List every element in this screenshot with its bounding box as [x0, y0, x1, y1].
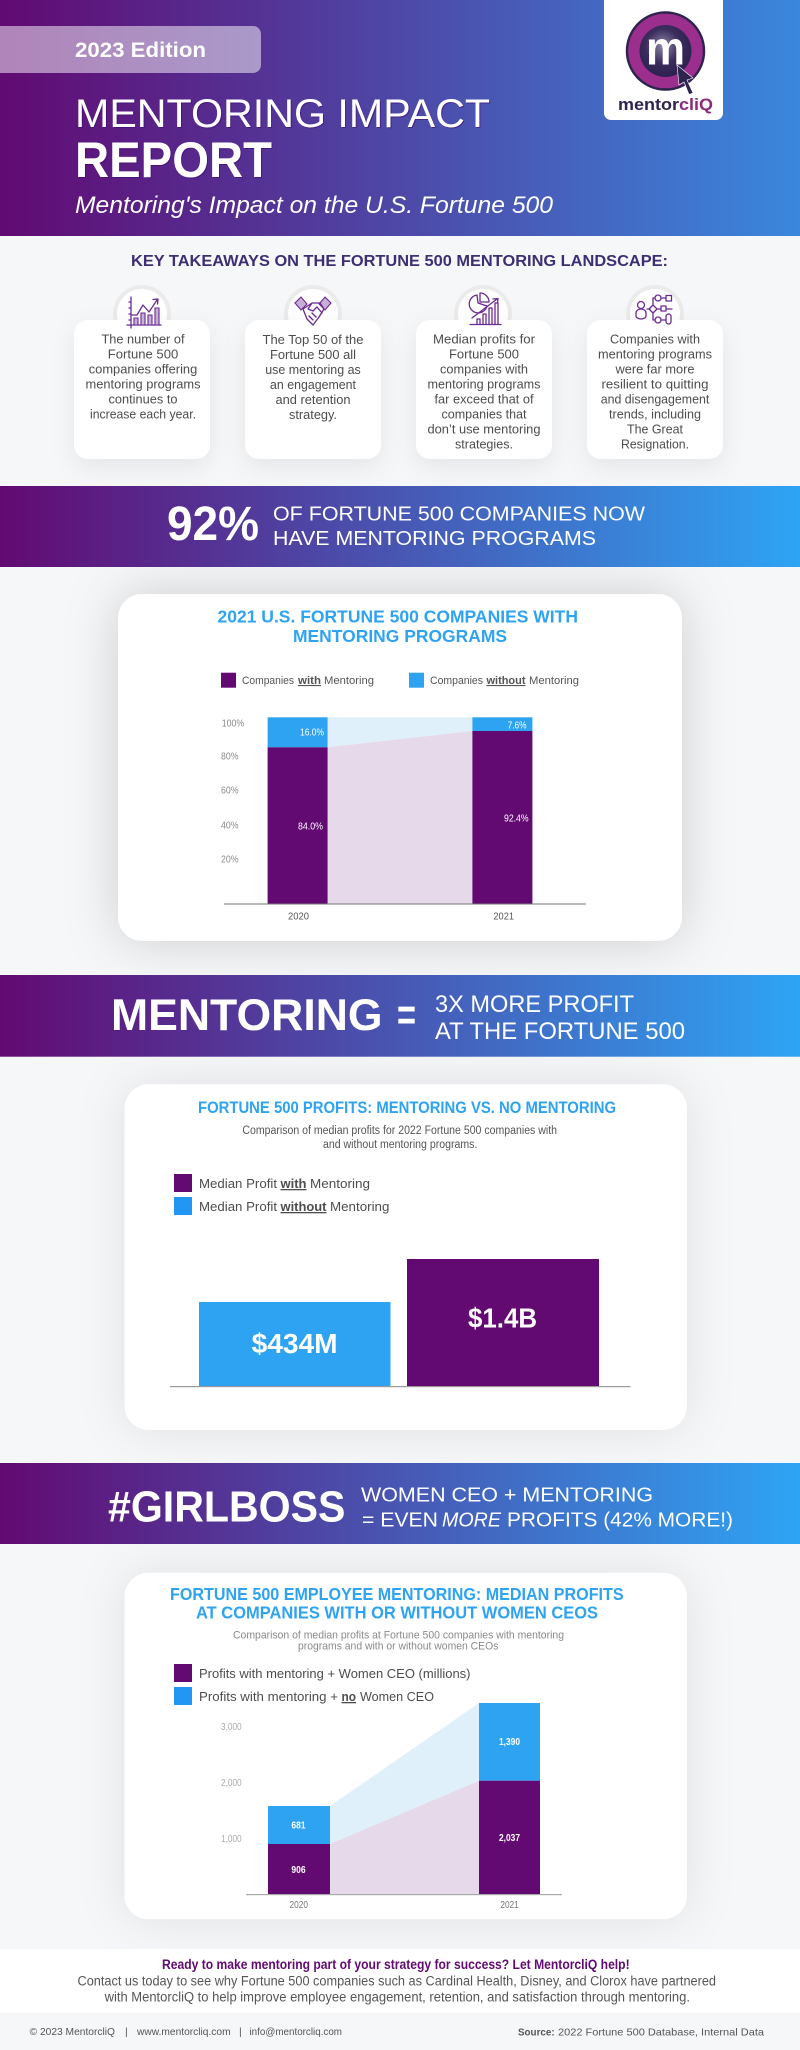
chart legend: Mentoring: [310, 1176, 370, 1191]
chart title: MENTORING PROGRAMS: [293, 626, 507, 646]
chart description: programs and with or without women CEOs: [298, 1640, 499, 1652]
panel: 2021 stacked bar chart: [118, 594, 682, 941]
bar: 2021: [472, 717, 532, 904]
banner: girlboss: PROFITS (42% MORE!): [507, 1509, 733, 1532]
y axis labels: 60%: [221, 784, 238, 796]
takeaway card 3: Fortune 500: [449, 346, 519, 362]
bar: without mentoring: $434M: [252, 1328, 338, 1359]
bar: 2021: 2,037: [499, 1833, 520, 1844]
takeaway card 2: an engagement: [270, 377, 356, 392]
chart title: [218, 607, 578, 646]
banner: 92%: [0, 486, 800, 567]
x axis labels: 2020: [288, 910, 309, 922]
banner: girlboss: #GIRLBOSS: [108, 1483, 345, 1532]
x axis labels: [290, 1900, 519, 1911]
bar: 2021: 1,390: [499, 1737, 520, 1748]
takeaway card 4: Resignation.: [621, 436, 689, 452]
call to action band: Contact us today to see why Fortune 500 companies such as Cardinal Health, Disney, and Clorox have partnered: [78, 1974, 716, 1988]
takeaway card 4: The Great: [627, 422, 683, 436]
takeaway card 1: companies offering: [89, 362, 197, 376]
chart legend: Women CEO: [360, 1689, 434, 1704]
banner: 92%: HAVE MENTORING PROGRAMS: [273, 528, 596, 550]
banner: mentoring equals profit: =: [397, 991, 416, 1040]
panel: women CEO stacked chart: [124, 1573, 687, 1919]
icon: growth chart: [127, 297, 161, 328]
bar: without mentoring: [199, 1302, 390, 1387]
chart title: AT COMPANIES WITH OR WITHOUT WOMEN CEOS: [196, 1602, 598, 1622]
edition pill: [0, 26, 261, 73]
banner: mentoring equals profit: MENTORING: [111, 991, 383, 1040]
chart legend: with: [297, 675, 321, 687]
chart legend: without: [280, 1199, 327, 1214]
heading: key takeaways: KEY TAKEAWAYS ON THE FORTUNE 500 MENTORING LANDSCAPE:: [131, 253, 668, 270]
report title: REPORT: [75, 132, 272, 188]
banner: 92%: 92%: [167, 498, 259, 551]
chart legend: Mentoring: [324, 675, 374, 687]
bar: 2021: [479, 1703, 540, 1895]
connecting bands: [328, 717, 472, 904]
footer: © 2023 MentorcliQ: [30, 2026, 115, 2038]
takeaway card 2: strategy.: [289, 407, 337, 422]
chart title: FORTUNE 500 PROFITS: MENTORING VS. NO MENTORING: [198, 1099, 616, 1117]
y axis labels: 40%: [221, 820, 238, 832]
chart legend: Median Profit: [199, 1199, 277, 1214]
bar: 2021: 92.4%: [504, 812, 529, 824]
chart legend: no: [342, 1689, 356, 1704]
bar: 2020: 906: [291, 1865, 306, 1876]
chart legend: with: [280, 1176, 307, 1191]
y axis labels: 20%: [221, 854, 238, 866]
takeaway card 2: The Top 50 of the: [262, 332, 364, 347]
y axis labels: 1,000: [221, 1834, 242, 1845]
footer: Source:: [518, 2026, 555, 2038]
y axis labels: [221, 718, 244, 866]
banner: mentoring equals profit: AT THE FORTUNE 500: [435, 1018, 685, 1045]
takeaway card 4: were far more: [615, 362, 694, 376]
bar: with mentoring: $1.4B: [468, 1303, 537, 1334]
connecting bands: [330, 1703, 479, 1895]
takeaway card 3: don’t use mentoring: [428, 422, 540, 436]
chart title: 2021 U.S. FORTUNE 500 COMPANIES WITH: [218, 607, 578, 627]
chart legend: without: [486, 675, 526, 687]
x axis labels: [288, 910, 514, 922]
y axis labels: 80%: [221, 750, 238, 762]
bar: with mentoring: [407, 1259, 599, 1387]
takeaway card 1: mentoring programs: [86, 376, 201, 392]
y axis labels: 100%: [222, 718, 244, 730]
takeaway card 4: resilient to quitting: [602, 376, 708, 392]
x axis labels: 2021: [500, 1900, 519, 1911]
bar: 2020: [268, 717, 328, 904]
y axis labels: 3,000: [221, 1722, 242, 1733]
banner: girlboss: MORE: [442, 1509, 501, 1532]
chart legend: Companies: [242, 675, 294, 687]
logo: MentorcliQ: m: [646, 22, 685, 74]
chart title: FORTUNE 500 EMPLOYEE MENTORING: MEDIAN PROFITS: [170, 1584, 624, 1604]
bar: 2020: [268, 1806, 330, 1895]
chart description: Comparison of median profits at Fortune 500 companies with mentoring: [233, 1630, 564, 1642]
banner: girlboss: [0, 1463, 800, 1544]
chart description: [242, 1125, 557, 1151]
chart description: Comparison of median profits for 2022 Fortune 500 companies with: [242, 1125, 557, 1137]
logo: MentorcliQ: [604, 0, 723, 120]
takeaway card 4: and disengagement: [601, 392, 710, 406]
icon: people flow diagram: [636, 295, 672, 324]
logo: MentorcliQ: mentor cliQ: [618, 96, 713, 114]
chart legend: [221, 673, 579, 688]
chart title: [170, 1584, 624, 1622]
chart legend: Mentoring: [330, 1199, 389, 1214]
x axis labels: 2020: [290, 1900, 308, 1911]
takeaway card 3: far exceed that of: [434, 392, 534, 406]
takeaway card 3: companies with: [440, 362, 528, 376]
header banner: [0, 0, 800, 236]
takeaway card 4: mentoring programs: [598, 346, 712, 362]
bar: 2021: 7.6%: [508, 720, 527, 732]
call to action band: [0, 1949, 800, 2013]
footer: info@mentorcliq.com: [250, 2026, 342, 2038]
x axis labels: 2021: [493, 910, 514, 922]
takeaway card 1: The number of: [102, 332, 185, 346]
takeaway card 4: Companies with: [610, 332, 700, 346]
chart legend: Companies: [430, 675, 483, 687]
takeaway card 2: [245, 287, 381, 459]
takeaway card 1: Fortune 500: [108, 346, 178, 362]
footer: [30, 2026, 764, 2038]
bar: 2020: 16.0%: [300, 726, 324, 738]
footer: |: [239, 2026, 242, 2038]
chart legend: Median Profit: [199, 1176, 277, 1191]
chart legend: [174, 1664, 470, 1705]
report title: [75, 92, 554, 219]
banner: mentoring equals profit: 3X MORE PROFIT: [435, 991, 634, 1018]
takeaway card 3: strategies.: [455, 436, 513, 452]
banner: girlboss: WOMEN CEO + MENTORING: [361, 1484, 653, 1507]
y axis labels: [221, 1722, 242, 1845]
chart description: and without mentoring programs.: [323, 1139, 477, 1151]
chart legend: [174, 1174, 389, 1215]
icon: handshake: [295, 297, 331, 325]
icon: pie chart with rising bars: [469, 293, 501, 324]
footer: 2022 Fortune 500 Database, Internal Data: [558, 2026, 764, 2038]
call to action band: Ready to make mentoring part of your strategy for success? Let MentorcliQ help!: [162, 1957, 630, 1972]
footer: |: [125, 2026, 128, 2038]
takeaway card 2: Fortune 500 all: [270, 347, 356, 362]
takeaway card 3: companies that: [442, 406, 527, 422]
bar: 2020: 84.0%: [298, 820, 323, 832]
banner: mentoring equals profit: [0, 975, 800, 1057]
panel: profit bar chart: [124, 1084, 687, 1430]
y axis labels: 2,000: [221, 1778, 242, 1789]
chart legend: Profits with mentoring + Women CEO (millions): [199, 1666, 470, 1681]
edition pill: 2023 Edition: [75, 39, 206, 62]
takeaway card 1: increase each year.: [90, 406, 196, 422]
takeaway card 3: Median profits for: [433, 332, 536, 346]
takeaway card 4: trends, including: [609, 406, 701, 422]
footer: www.mentorcliq.com: [136, 2026, 231, 2038]
report title: MENTORING IMPACT: [75, 92, 490, 136]
call to action band: with MentorcliQ to help improve employee engagement, retention, and satisfaction through mentoring.: [104, 1990, 690, 2004]
takeaway card 3: mentoring programs: [428, 376, 541, 392]
takeaway card 1: [74, 287, 210, 459]
report title: Mentoring's Impact on the U.S. Fortune 500: [75, 192, 554, 219]
banner: 92%: OF FORTUNE 500 COMPANIES NOW: [273, 504, 645, 526]
takeaway card 2: use mentoring as: [265, 362, 361, 377]
banner: girlboss: = EVEN: [362, 1509, 438, 1532]
takeaway card 2: and retention: [276, 392, 350, 407]
takeaway card 3: [416, 287, 552, 459]
takeaway card 4: [587, 287, 723, 459]
takeaway card 1: continues to: [108, 392, 178, 406]
chart legend: Mentoring: [529, 675, 579, 687]
chart legend: Profits with mentoring +: [199, 1689, 338, 1704]
chart description: [233, 1630, 564, 1652]
bar: 2020: 681: [291, 1820, 306, 1832]
